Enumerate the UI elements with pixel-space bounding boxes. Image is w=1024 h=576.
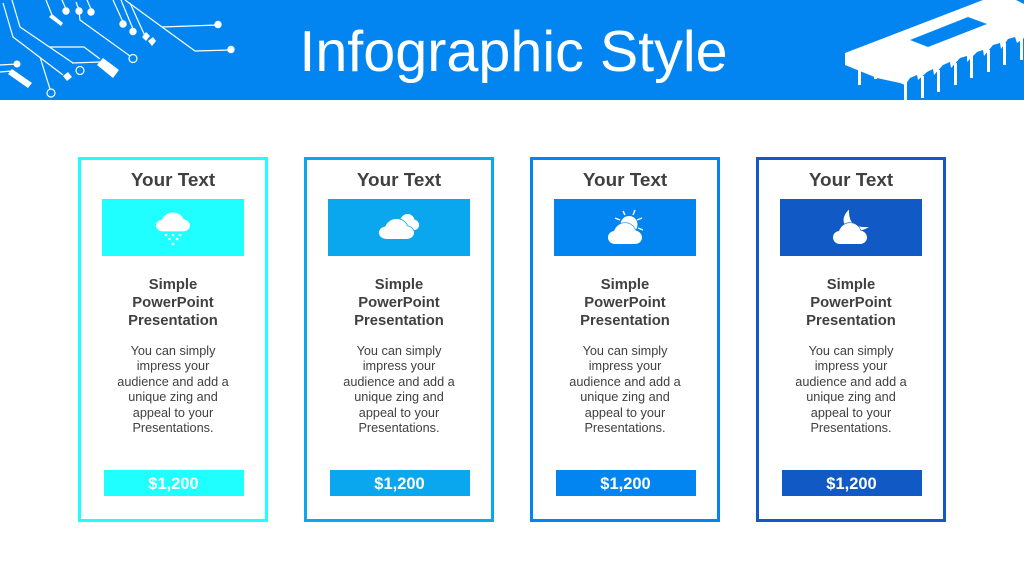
card 4 body text: Presentations. — [810, 421, 892, 435]
card 1 subheading: Presentation — [128, 313, 218, 329]
card 3 price: $1,200 — [600, 475, 651, 493]
card 1 price: $1,200 — [148, 475, 199, 493]
card 1 body text: You can simply — [131, 344, 215, 358]
panel: card 3 — [530, 157, 720, 522]
card 2 subheading: Presentation — [354, 313, 444, 329]
card 2 body text: appeal to your — [359, 406, 439, 420]
card 3 subheading — [580, 277, 670, 329]
card 1 body text: unique zing and — [128, 390, 218, 404]
card 3 heading: Your Text — [583, 170, 667, 191]
card 4 subheading: Presentation — [806, 313, 896, 329]
card 1 subheading — [128, 277, 218, 329]
card 2 subheading: Simple — [375, 277, 423, 293]
header banner — [0, 0, 1024, 100]
card 2 body text: You can simply — [357, 344, 441, 358]
card 2 price: $1,200 — [374, 475, 425, 493]
card 2 heading: Your Text — [357, 170, 441, 191]
card 1 body text: Presentations. — [132, 421, 214, 435]
panel: card 4 — [756, 157, 946, 522]
card 2 body text — [343, 344, 455, 435]
icon: microchip — [845, 0, 1024, 100]
card 4 price: $1,200 — [826, 475, 877, 493]
card 1 subheading: PowerPoint — [132, 295, 214, 311]
panel: card 2 — [304, 157, 494, 522]
card 3 subheading: PowerPoint — [584, 295, 666, 311]
card 2 body text: audience and add a — [343, 375, 455, 389]
card 2 body text: unique zing and — [354, 390, 444, 404]
card 2 price — [330, 470, 470, 496]
card 4 body text: You can simply — [809, 344, 893, 358]
card 1 body text — [117, 344, 229, 435]
icon: circuit traces — [0, 0, 235, 98]
card 3 body text: unique zing and — [580, 390, 670, 404]
card 4 body text: impress your — [815, 359, 887, 373]
card 4 body text: appeal to your — [811, 406, 891, 420]
card 3 icon box: sun and cloud — [554, 199, 696, 256]
card 1 price — [104, 470, 244, 496]
card 3 body text: Presentations. — [584, 421, 666, 435]
title: Infographic Style — [299, 20, 728, 84]
card 1 body text: audience and add a — [117, 375, 229, 389]
card 4 price — [782, 470, 922, 496]
card 2 icon box: double cloud — [328, 199, 470, 256]
card 3 subheading: Simple — [601, 277, 649, 293]
card 3 body text: impress your — [589, 359, 661, 373]
card 3 body text: audience and add a — [569, 375, 681, 389]
card 4 icon box: moon and cloud — [780, 199, 922, 256]
panel: card 1 — [78, 157, 268, 522]
card 2 subheading — [354, 277, 444, 329]
card 3 body text — [569, 344, 681, 435]
card 1 subheading: Simple — [149, 277, 197, 293]
card 4 subheading: Simple — [827, 277, 875, 293]
card 3 price — [556, 470, 696, 496]
card 4 body text: unique zing and — [806, 390, 896, 404]
card 4 heading: Your Text — [809, 170, 893, 191]
card 1 heading: Your Text — [131, 170, 215, 191]
card 4 subheading: PowerPoint — [810, 295, 892, 311]
card 2 body text: impress your — [363, 359, 435, 373]
card 3 body text: appeal to your — [585, 406, 665, 420]
card 1 body text: appeal to your — [133, 406, 213, 420]
card 4 body text — [795, 344, 907, 435]
card 4 body text: audience and add a — [795, 375, 907, 389]
card 3 body text: You can simply — [583, 344, 667, 358]
card 4 subheading — [806, 277, 896, 329]
card 1 icon box: rain cloud — [102, 199, 244, 256]
card 1 body text: impress your — [137, 359, 209, 373]
card 3 subheading: Presentation — [580, 313, 670, 329]
card 2 body text: Presentations. — [358, 421, 440, 435]
card 2 subheading: PowerPoint — [358, 295, 440, 311]
